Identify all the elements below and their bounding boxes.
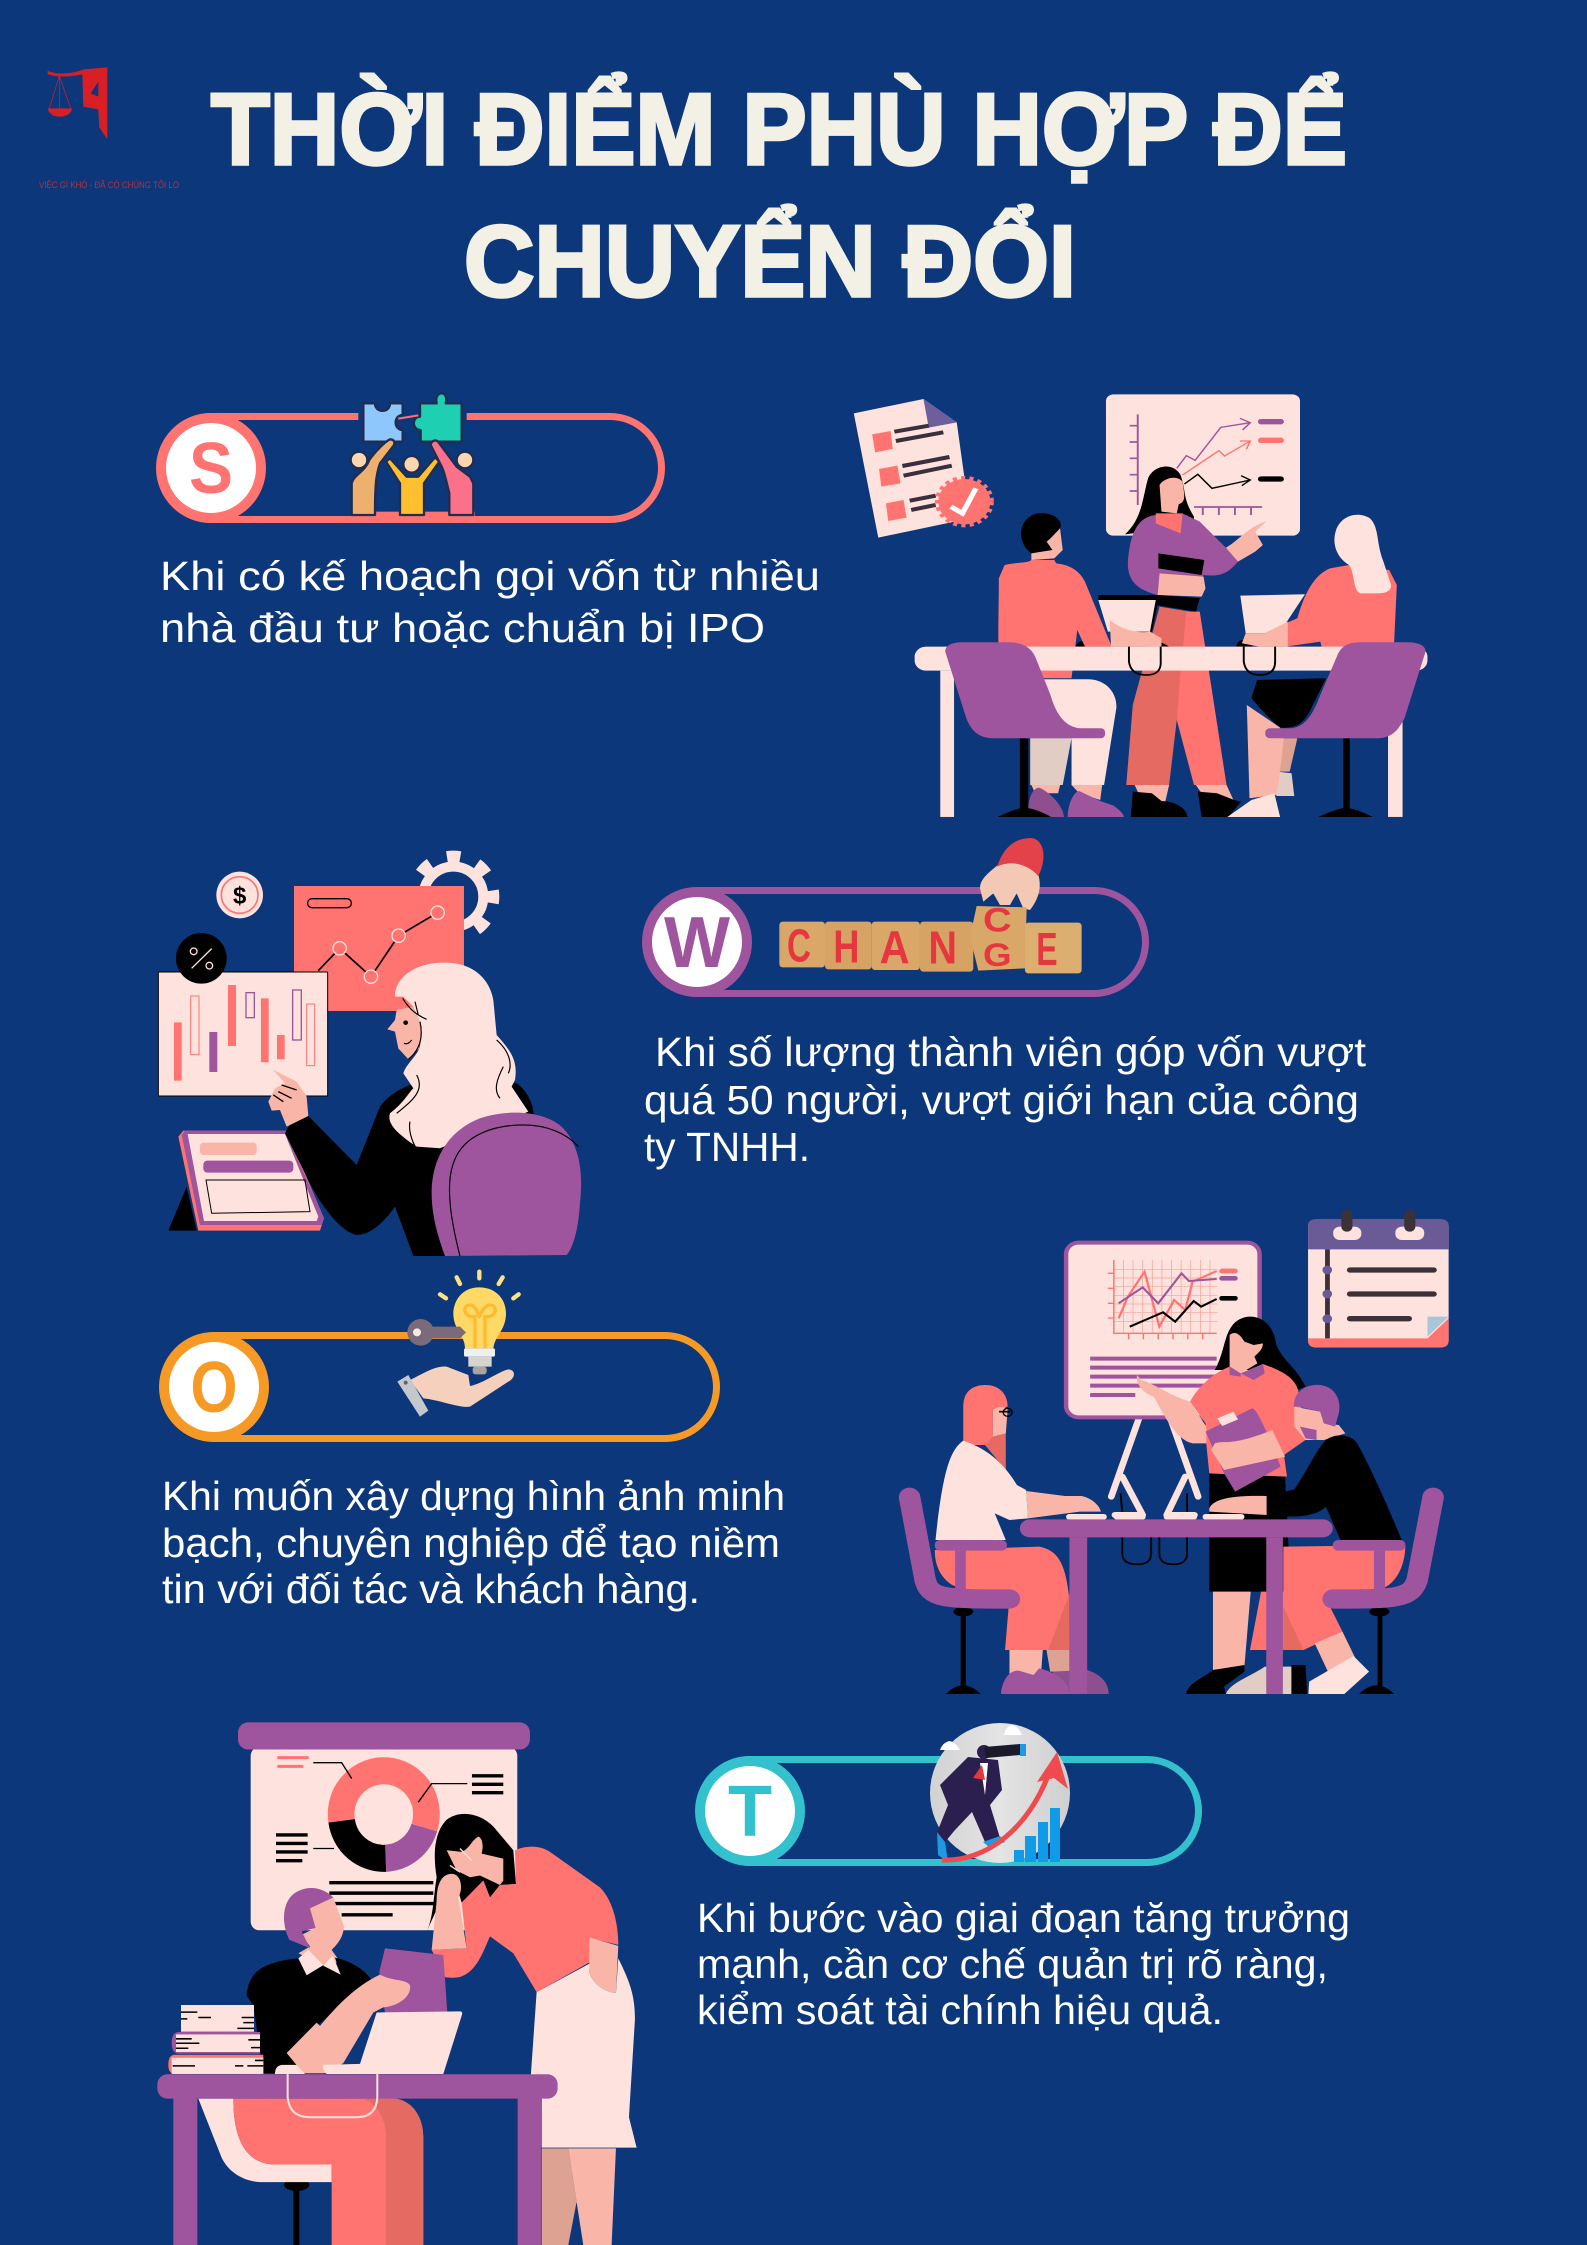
standing woman bbox=[427, 1814, 637, 2245]
board with line chart bbox=[1106, 394, 1300, 536]
icon: scales and letter mark bbox=[48, 67, 107, 139]
text O: tin với đối tác và khách hàng. bbox=[162, 1566, 700, 1612]
logo bbox=[39, 67, 179, 191]
text O: bạch, chuyên nghiệp để tạo niềm bbox=[162, 1520, 780, 1566]
title bbox=[211, 74, 1347, 318]
pill O: O bbox=[190, 1348, 238, 1428]
block letters bbox=[787, 902, 1058, 975]
pill T bbox=[695, 1756, 1198, 1866]
easel board bbox=[1066, 1243, 1260, 1515]
keyboards bbox=[1066, 1514, 1244, 1520]
rays bbox=[440, 1272, 519, 1298]
tablet bbox=[168, 1131, 324, 1231]
desk bbox=[157, 2074, 558, 2245]
panel: W bbox=[642, 838, 1367, 1170]
candlestick card bbox=[158, 972, 328, 1096]
standing presenter bbox=[1098, 467, 1267, 817]
illustration: meeting at table bbox=[854, 394, 1427, 817]
logo tagline: VIỆC GÌ KHÓ - ĐÃ CÓ CHÚNG TÔI LO bbox=[39, 180, 179, 191]
seated left person bbox=[935, 1385, 1109, 1694]
text W: ty TNHH. bbox=[644, 1124, 810, 1170]
growth bars bbox=[1014, 1808, 1060, 1862]
text T bbox=[697, 1895, 1350, 2033]
block letters: H bbox=[833, 920, 859, 972]
checklist document bbox=[854, 399, 992, 538]
bulb bbox=[453, 1287, 506, 1374]
seated man bbox=[247, 1888, 410, 2073]
text W bbox=[644, 1029, 1367, 1170]
desk bbox=[1020, 1519, 1333, 1694]
text T: kiểm soát tài chính hiệu quả. bbox=[697, 1987, 1223, 2033]
pill O bbox=[159, 1332, 716, 1442]
table bbox=[915, 647, 1427, 817]
seated woman bbox=[1242, 515, 1397, 671]
coral chart panel bbox=[294, 886, 464, 1011]
businessman bbox=[936, 1744, 1026, 1862]
laptops bbox=[1076, 594, 1305, 647]
percent badge bbox=[176, 933, 227, 984]
illustration: woman analysing charts bbox=[158, 857, 581, 1256]
chairs bbox=[945, 642, 1426, 817]
text S: Khi có kế hoạch gọi vốn từ nhiều bbox=[160, 553, 820, 599]
text O: Khi muốn xây dựng hình ảnh minh bbox=[162, 1473, 785, 1519]
text S: nhà đầu tư hoặc chuẩn bị IPO bbox=[160, 605, 765, 651]
illustration: team at computers bbox=[910, 1210, 1449, 1694]
text T: Khi bước vào giai đoạn tăng trưởng bbox=[697, 1895, 1350, 1941]
text T: mạnh, cần cơ chế quản trị rõ ràng, bbox=[697, 1941, 1328, 1987]
hand bbox=[397, 1366, 514, 1417]
clipboard bbox=[379, 1948, 447, 2012]
blocks bbox=[779, 906, 1082, 973]
presentation screen bbox=[238, 1722, 530, 1930]
text O bbox=[162, 1473, 785, 1612]
pill T: T bbox=[728, 1772, 772, 1852]
block letters: E bbox=[1036, 923, 1058, 975]
icon: CHANGE wooden blocks bbox=[779, 838, 1082, 975]
text W: Khi số lượng thành viên góp vốn vượt bbox=[655, 1029, 1367, 1075]
standing woman bbox=[1137, 1317, 1305, 1694]
panel: O bbox=[159, 1272, 785, 1612]
icon: key, bulb and hand bbox=[397, 1272, 519, 1417]
pill W bbox=[642, 887, 1146, 997]
seated legs bbox=[1028, 678, 1326, 817]
block letters: N bbox=[928, 921, 957, 973]
icon: businessman with telescope and growth arrow bbox=[930, 1723, 1070, 1863]
right office chair bbox=[1333, 1497, 1433, 1694]
gear bbox=[413, 857, 493, 937]
armchair bbox=[432, 1113, 581, 1256]
block letters: A bbox=[880, 921, 910, 973]
illustration: colleagues reviewing donut chart bbox=[157, 1722, 637, 2245]
book stack bbox=[168, 2005, 263, 2074]
coin: $ bbox=[233, 883, 246, 910]
donut chart bbox=[341, 1771, 426, 1858]
laptop bbox=[275, 2011, 462, 2074]
seated right person bbox=[1209, 1385, 1405, 1694]
icon: team holding puzzle pieces bbox=[351, 393, 475, 516]
hand bbox=[980, 838, 1044, 910]
block letters: G bbox=[983, 937, 1012, 973]
clouds bbox=[940, 1725, 1022, 1750]
key bbox=[407, 1319, 466, 1346]
calendar bbox=[1308, 1210, 1449, 1347]
pill S bbox=[156, 413, 662, 523]
title: THỜI ĐIỂM PHÙ HỢP ĐỂ bbox=[211, 74, 1347, 186]
globe bbox=[930, 1723, 1070, 1863]
pill W: W bbox=[664, 903, 730, 983]
desk chair and man's legs bbox=[198, 2099, 423, 2245]
seated man bbox=[998, 513, 1161, 678]
left office chair bbox=[910, 1497, 1009, 1694]
block letters: C bbox=[983, 902, 1012, 940]
panel: T bbox=[695, 1723, 1350, 2033]
pill S: S bbox=[189, 429, 233, 509]
block letters: C bbox=[787, 920, 811, 972]
title: CHUYỂN ĐỔI bbox=[464, 206, 1076, 318]
text S bbox=[160, 553, 820, 651]
panel: S bbox=[156, 393, 820, 651]
coin bbox=[216, 872, 263, 918]
woman bbox=[268, 963, 534, 1256]
cables bbox=[1122, 1537, 1187, 1564]
growth arrow bbox=[942, 1752, 1068, 1860]
text W: quá 50 người, vượt giới hạn của công bbox=[644, 1077, 1359, 1123]
chart legends bbox=[276, 1758, 503, 1915]
